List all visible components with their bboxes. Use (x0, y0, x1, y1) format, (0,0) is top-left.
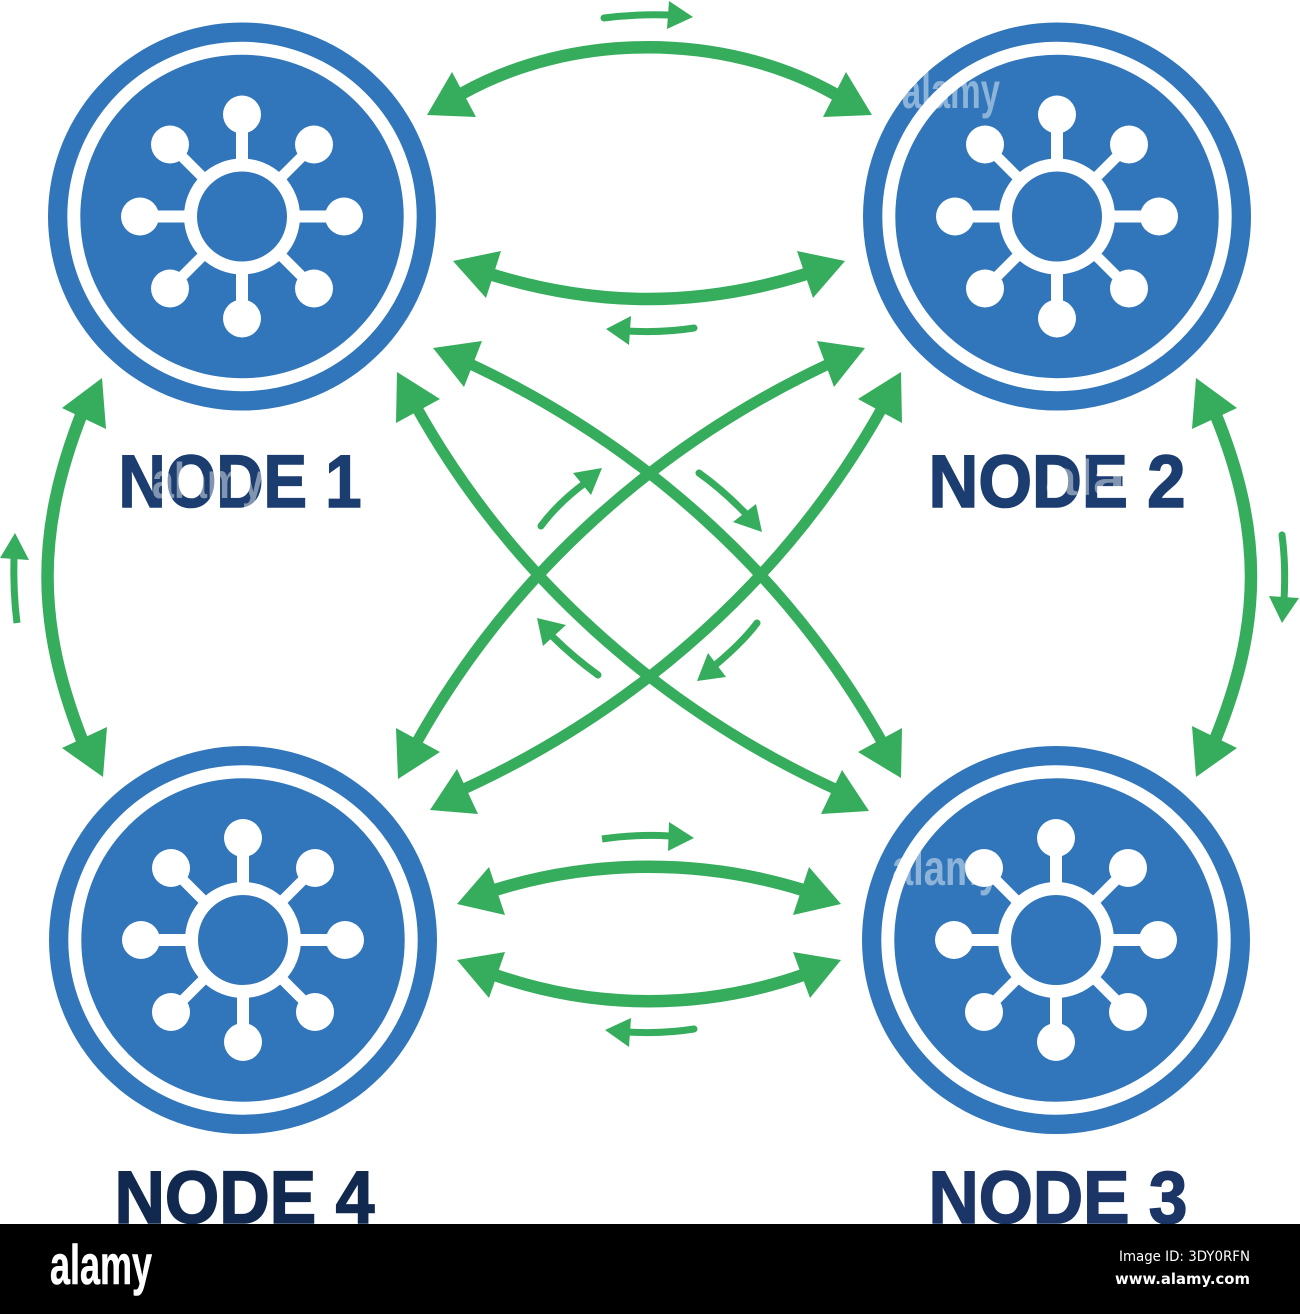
watermark fragments: ala (1045, 450, 1126, 506)
footer url: www.alamy.com (1115, 1270, 1250, 1288)
arrow: node 4 to node 3 upper (457, 867, 841, 915)
arrow: node 2 to node 4 upper diagonal (396, 341, 865, 779)
node 1 icon (48, 22, 436, 410)
small arrow: centre down-right (699, 473, 762, 532)
arrow: node 1 to node 2 lower (453, 251, 845, 299)
node 3 icon (862, 746, 1250, 1134)
arrow: node 1 to node 4 (48, 378, 107, 777)
label: node 2: NODE 2 (928, 440, 1186, 523)
small arrow: right side down (1269, 535, 1299, 623)
watermark fragments: alamy (892, 840, 1000, 896)
small arrow: centre down-left (697, 623, 757, 681)
label: node 4: NODE 4 (114, 1156, 374, 1239)
arrow: node 1 to node 3 lower diagonal (396, 372, 869, 814)
node 4 icon (49, 746, 437, 1134)
arrow: node 2 to node 3 (1192, 378, 1251, 777)
arrow: node 4 to node 3 lower (457, 952, 841, 1001)
node 2 icon (863, 22, 1251, 410)
arrow: node 1 to node 2 upper (427, 47, 872, 117)
small arrow: bottom left-pointing (605, 1018, 694, 1047)
arrow: node 2 to node 4 lower diagonal (430, 372, 902, 814)
footer image id: Image ID: 3DY0RFN (1119, 1249, 1250, 1265)
small arrow: top right-pointing (604, 1, 693, 29)
footer band (0, 1224, 1300, 1314)
label: node 1: NODE 1 (118, 440, 362, 523)
small arrow: lower right-pointing (602, 822, 694, 851)
small arrow: centre up-left (537, 618, 598, 675)
watermark fragments: alamy (902, 63, 1000, 119)
arrow: node 1 to node 3 upper diagonal (433, 341, 902, 778)
footer logo: alamy (50, 1233, 152, 1296)
label: node 3: NODE 3 (928, 1156, 1188, 1239)
small arrow: upper left-pointing (606, 316, 694, 345)
watermark fragments (152, 63, 1126, 896)
small arrow: centre up-right (541, 468, 602, 526)
small arrow: left side up (0, 533, 29, 623)
watermark fragments: alamy (152, 453, 264, 509)
